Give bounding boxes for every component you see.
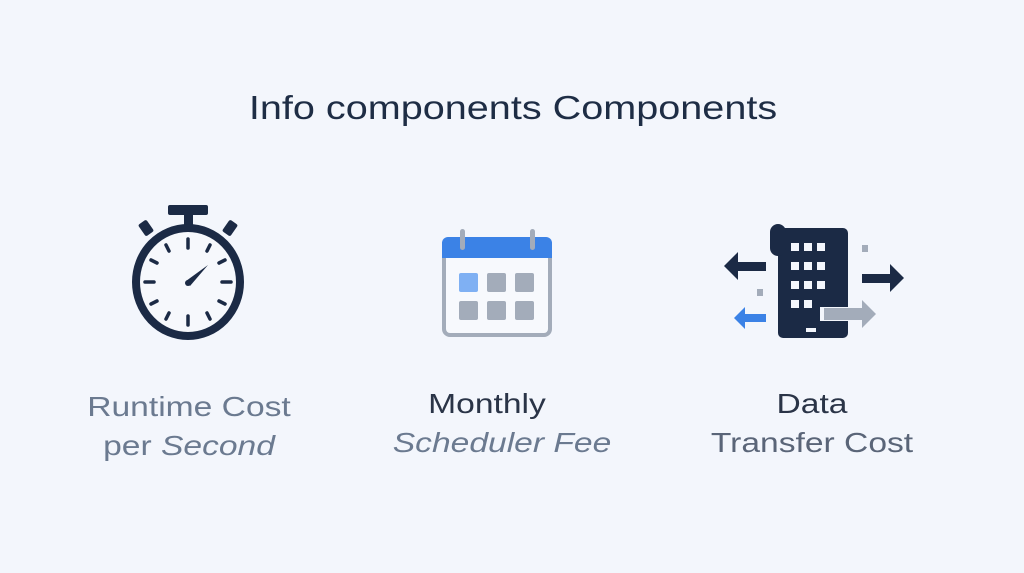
label: data transfer cost: Data	[777, 388, 847, 419]
title: Info components Components	[249, 89, 777, 126]
label: runtime cost	[87, 391, 291, 461]
label: runtime cost: per Second	[103, 430, 275, 461]
label: monthly scheduler fee	[393, 388, 611, 458]
label: monthly scheduler fee: Scheduler Fee	[393, 427, 611, 458]
label: runtime cost: Runtime Cost	[87, 391, 291, 422]
label: data transfer cost	[711, 388, 913, 458]
label: monthly scheduler fee: Monthly	[428, 388, 546, 419]
icon: stopwatch	[132, 205, 244, 340]
icon: calendar	[442, 229, 552, 337]
icon: data transfer building	[724, 224, 904, 338]
label: data transfer cost: Transfer Cost	[711, 427, 913, 458]
